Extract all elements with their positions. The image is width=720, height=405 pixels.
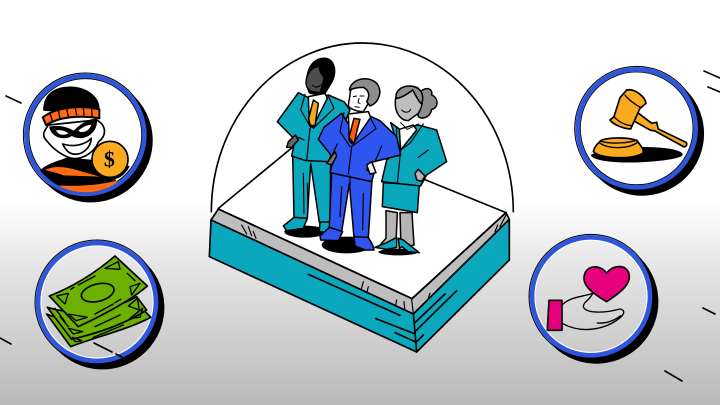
dome outline xyxy=(211,43,513,212)
dash near money left xyxy=(0,338,11,344)
banknotes xyxy=(47,256,151,347)
dash near heart upper xyxy=(703,308,715,314)
gavel shadow xyxy=(591,147,683,163)
dashes near gavel xyxy=(704,71,720,92)
beanie xyxy=(44,87,99,112)
ring xyxy=(575,66,704,196)
platform teal base xyxy=(209,219,509,352)
icon: thief with coin xyxy=(23,73,153,203)
man left xyxy=(277,58,350,233)
hand xyxy=(562,293,624,330)
floor shadows xyxy=(284,226,418,255)
icon: hand holding heart xyxy=(529,234,658,364)
gavel base xyxy=(593,138,643,158)
cuff xyxy=(547,300,562,330)
platform top xyxy=(218,147,506,298)
coin: $ xyxy=(104,147,115,172)
icon: stack of money xyxy=(35,240,164,369)
dash near heart lower xyxy=(665,371,682,381)
ring xyxy=(529,234,658,364)
ring xyxy=(35,240,164,369)
icon: gavel xyxy=(575,66,704,196)
mask xyxy=(50,119,96,137)
woman right xyxy=(375,86,447,253)
glass dome and platform xyxy=(209,43,513,352)
face xyxy=(44,120,104,158)
gavel head xyxy=(610,90,646,129)
business people xyxy=(277,58,447,255)
platform grey rim xyxy=(211,209,509,314)
dash near money right xyxy=(94,343,122,357)
heart xyxy=(584,267,629,302)
gavel handle xyxy=(634,112,687,147)
smile xyxy=(63,138,91,154)
ring xyxy=(23,73,153,202)
dash near thief xyxy=(6,96,21,103)
striped sweater xyxy=(40,158,117,192)
man centre xyxy=(318,79,401,250)
